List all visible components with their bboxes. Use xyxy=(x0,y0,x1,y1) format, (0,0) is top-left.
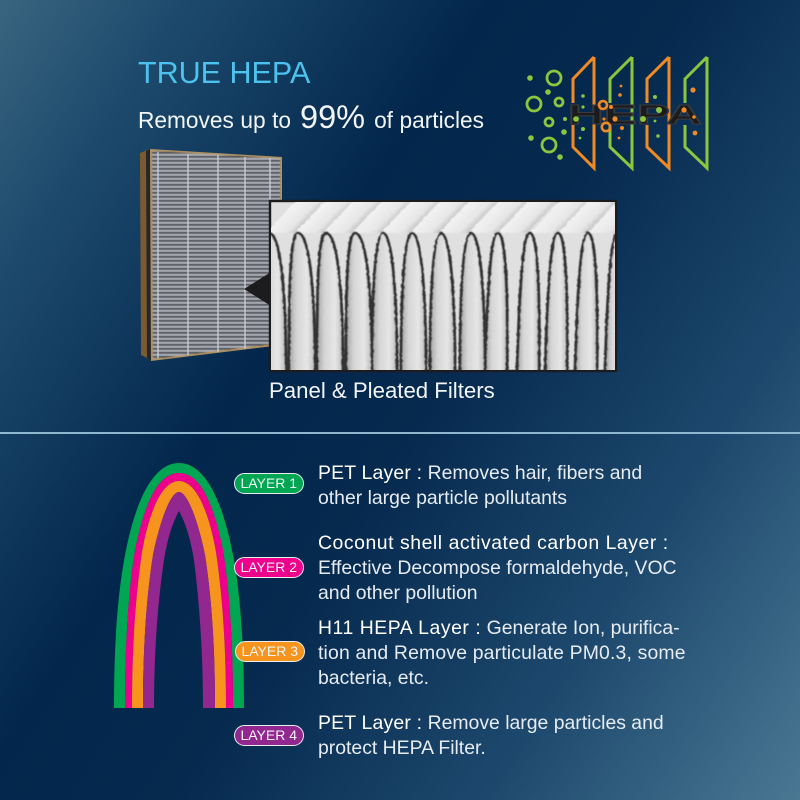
text: layer 1: PET Layer : Removes hair, fibers and xyxy=(318,462,642,484)
logo wordmark: HEPA xyxy=(568,99,702,130)
text: layer 3: H11 HEPA Layer : Generate Ion, purifica- xyxy=(318,617,680,639)
panel filter photo xyxy=(140,149,282,361)
title: TRUE HEPA: TRUE HEPA xyxy=(138,56,310,90)
text: layer 4: PET Layer : Remove large particles and xyxy=(318,712,664,734)
text: layer 4 xyxy=(318,712,664,759)
label: layer 1: LAYER 1 xyxy=(240,475,297,491)
text: layer 1: other large particle pollutants xyxy=(318,487,567,509)
divider xyxy=(0,432,800,434)
label: layer 2 xyxy=(234,557,304,578)
subtitle: removes up to 99%: Removes up to 99% of particles xyxy=(138,99,484,135)
text: layer 2: Coconut shell activated carbon Layer : xyxy=(318,532,669,554)
pleated filter close-up photo xyxy=(244,200,618,372)
pointer triangle xyxy=(244,272,271,306)
text: layer 2 xyxy=(318,532,677,604)
label: layer 3 xyxy=(235,641,304,662)
text: layer 2: and other pollution xyxy=(318,582,478,604)
label: layer 1 xyxy=(234,473,304,494)
text: layer 3 xyxy=(318,617,686,689)
text: layer 2: Effective Decompose formaldehyde, VOC xyxy=(318,557,677,579)
label: layer 3: LAYER 3 xyxy=(241,643,298,659)
label: layer 4: LAYER 4 xyxy=(240,727,297,743)
text: layer 1 xyxy=(318,462,642,509)
text: layer 3: bacteria, etc. xyxy=(318,667,429,689)
caption: Panel & Pleated Filters xyxy=(269,378,495,403)
text: layer 3: tion and Remove particulate PM0.3, some xyxy=(318,642,686,664)
diagram: four-layer arch xyxy=(114,463,244,708)
label: layer 2: LAYER 2 xyxy=(240,559,297,575)
text: layer 4: protect HEPA Filter. xyxy=(318,737,486,759)
label: layer 4 xyxy=(234,725,304,746)
icon: HEPA filter layers logo xyxy=(526,56,708,172)
